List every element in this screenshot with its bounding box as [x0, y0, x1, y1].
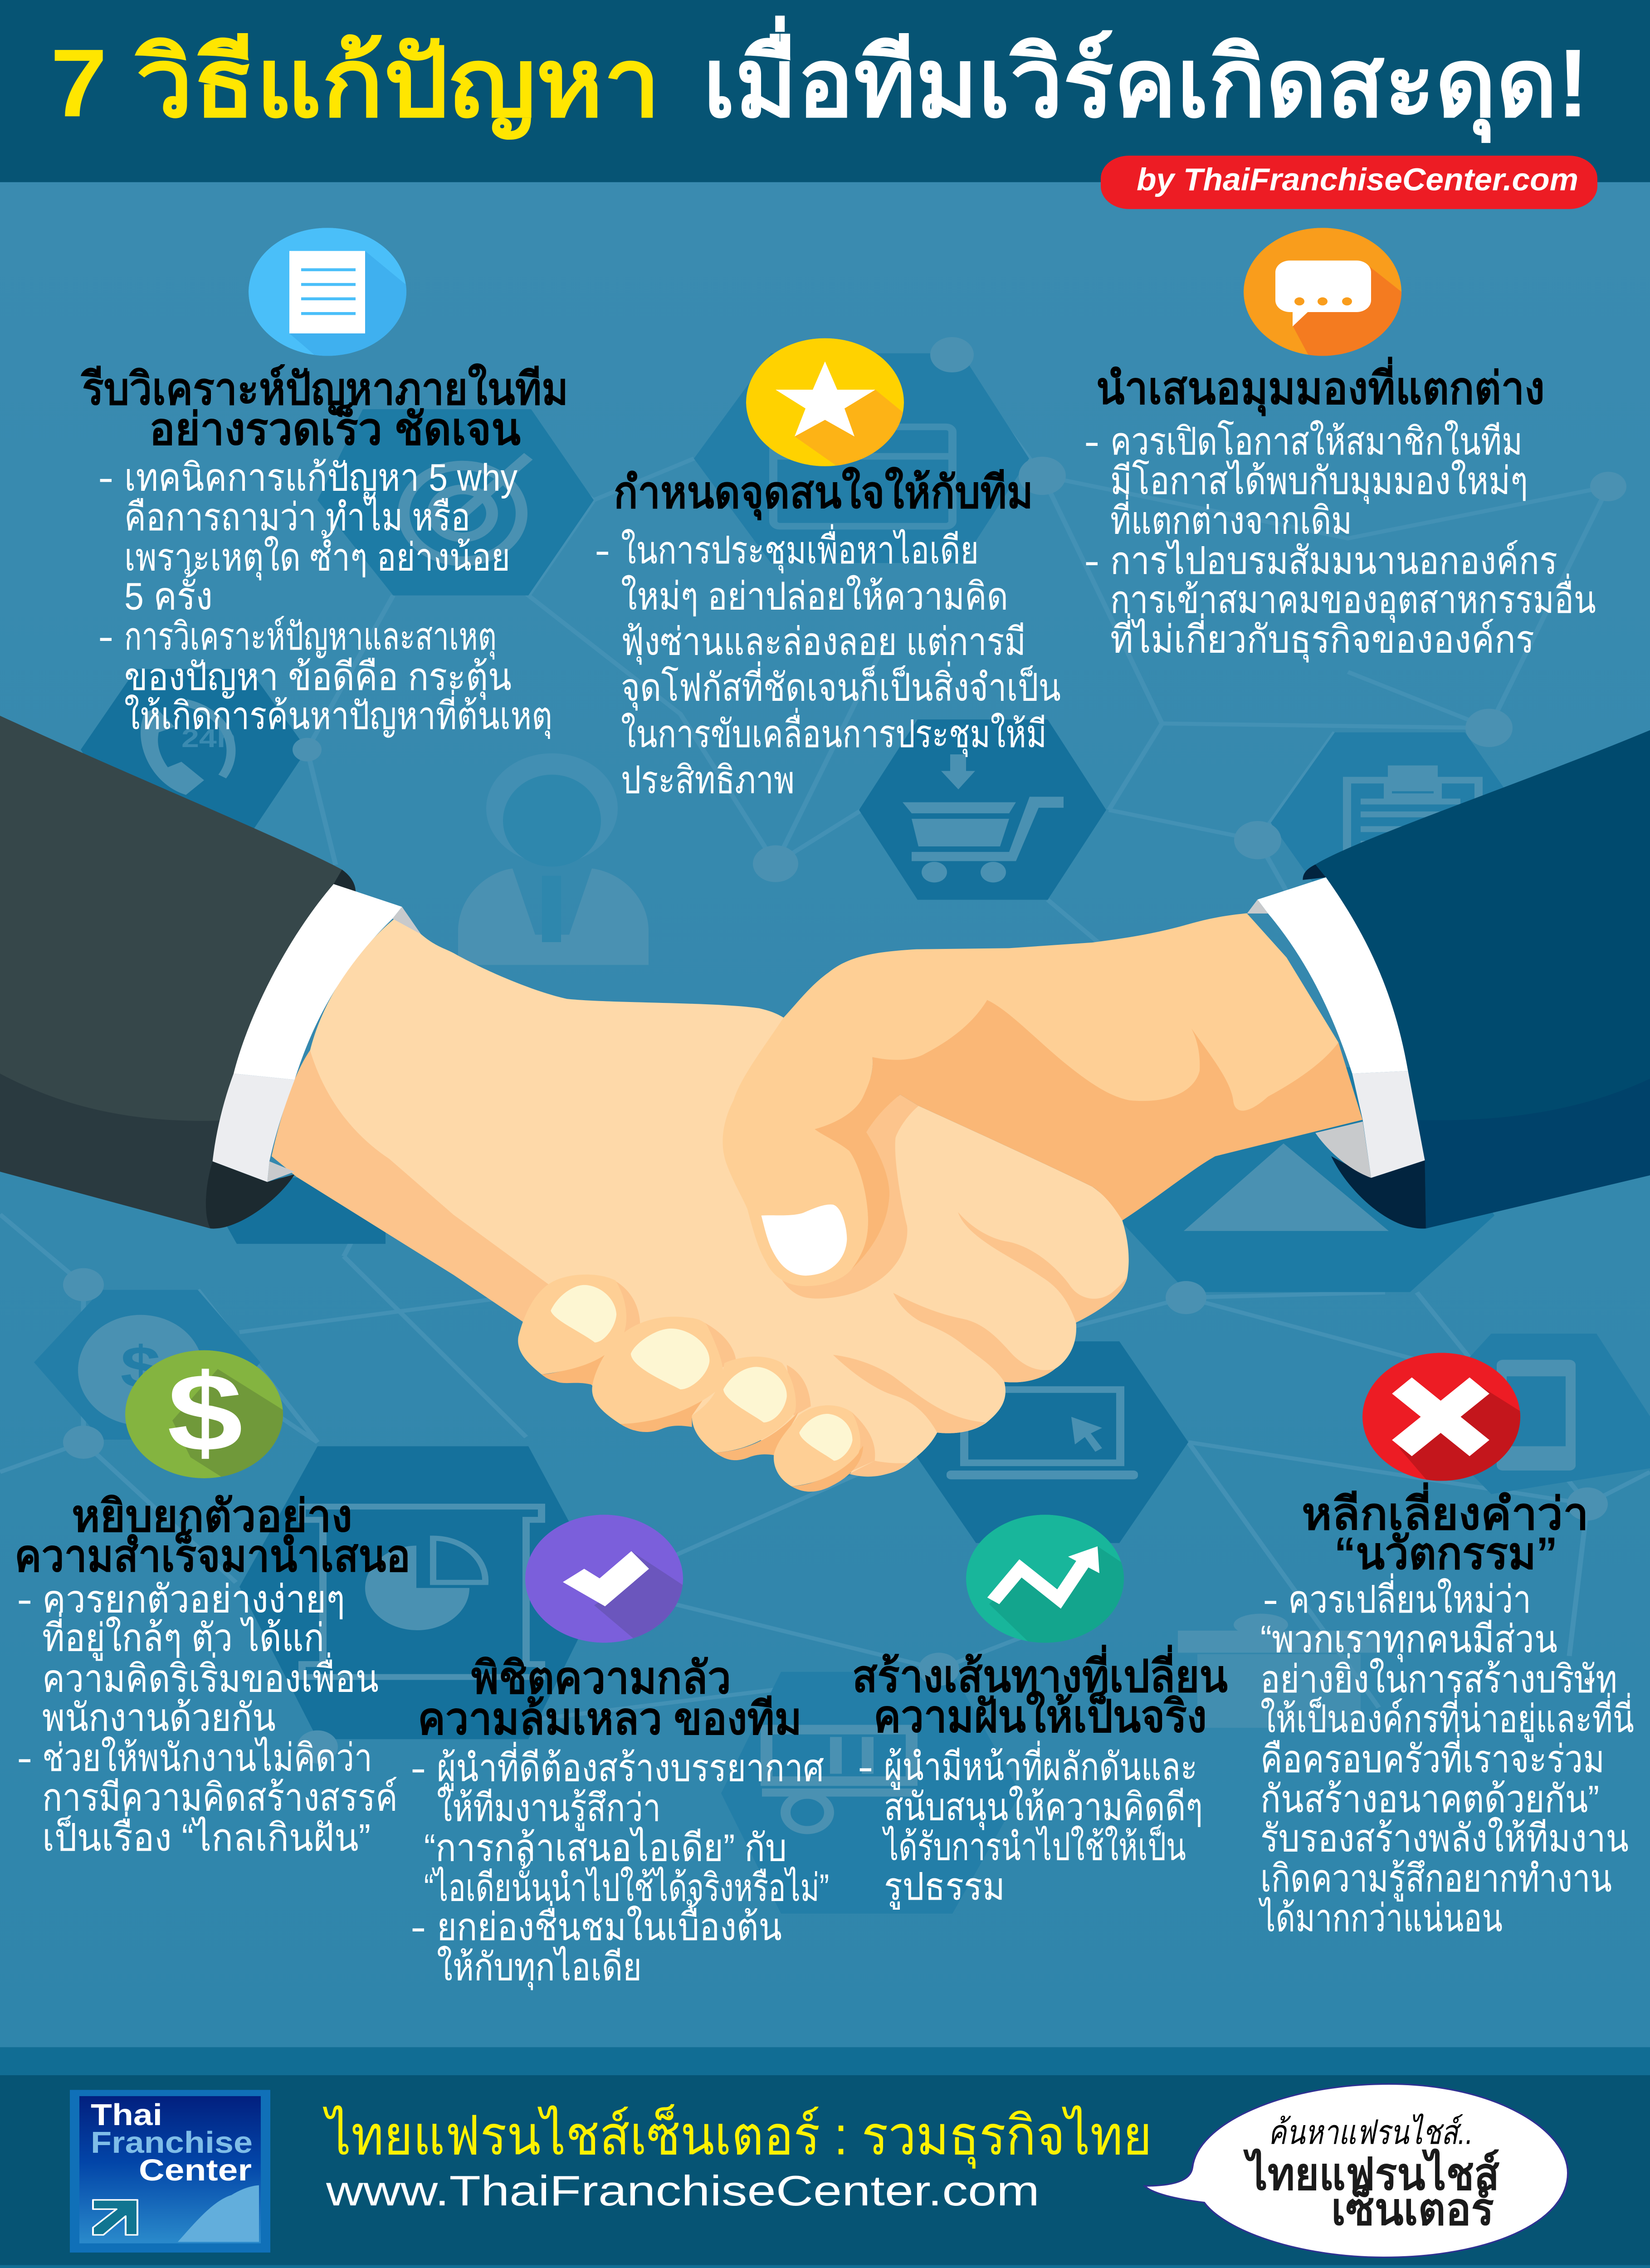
right hand shadow: [815, 1000, 1362, 1269]
body text: -: [17, 1736, 33, 1779]
heading: “นวัตกรรม”: [1334, 1528, 1557, 1579]
heading: รีบวิเคราะห์ปัญหาภายในทีม: [81, 363, 568, 416]
body text: -: [858, 1745, 874, 1789]
icon: dollar: [125, 1350, 283, 1478]
thumb nail: [762, 1204, 847, 1276]
body text: ใหม่ๆ อย่าปล่อยให้ความคิด: [621, 575, 1008, 618]
body text: ในการประชุมเพื่อหาไอเดีย: [621, 524, 979, 573]
icon: background phone 24h: 24h: [181, 723, 236, 753]
body text: -: [98, 456, 114, 499]
body text: ควรเปลี่ยนใหม่ว่า: [1288, 1574, 1531, 1621]
right sleeve: [1303, 730, 1650, 1228]
speech bubble: ค้นหาแฟรนไชส์..: [1268, 2113, 1473, 2151]
byline badge: [1101, 156, 1597, 209]
body text: ยกย่องชื่นชมในเบื้องต้น: [437, 1899, 782, 1949]
logo: Center: [139, 2153, 252, 2187]
body text: -: [1084, 539, 1100, 582]
body text: [1258, 1574, 1634, 1940]
body text: เพราะเหตุใด ซ้ำๆ อย่างน้อย: [124, 530, 510, 581]
icon: background dollar: [78, 1315, 203, 1425]
icon: background cart: [903, 754, 1064, 882]
panel: different perspectives: [1084, 357, 1596, 663]
icon: cross: [1362, 1353, 1520, 1481]
body text: [1084, 420, 1596, 663]
finger 1: [518, 1275, 626, 1386]
heading: อย่างรวดเร็ว ชัดเจน: [149, 402, 521, 454]
heading: [15, 1491, 410, 1581]
body text: การวิเคราะห์ปัญหาและสาเหตุ: [124, 615, 497, 660]
finger 2: [592, 1317, 723, 1432]
icon: background gift: [1178, 1614, 1380, 1728]
heading: [852, 1645, 1228, 1741]
panel: analyse the problem: [81, 363, 568, 739]
heading: [418, 1652, 802, 1744]
icon: background laptop: [947, 1389, 1138, 1479]
body text: “การกล้าเสนอไอเดีย” กับ: [424, 1827, 787, 1869]
icon: background phone 24h: [141, 703, 236, 795]
heading: พิชิตความกลัว: [471, 1652, 731, 1703]
logo: [70, 2090, 270, 2253]
icon: background tablet: [1497, 1360, 1576, 1471]
body text: ผู้นำมีหน้าที่ผลักดันและ: [884, 1741, 1197, 1790]
footer headline: ไทยแฟรนไชส์เซ็นเตอร์ : รวมธุรกิจไทย: [323, 2104, 1152, 2168]
panel: make dreams real: [852, 1645, 1228, 1910]
icon: background truck: [762, 1730, 916, 1830]
heading: หลีกเลี่ยงคำว่า: [1302, 1482, 1589, 1539]
heading: ความล้มเหลว ของทีม: [418, 1693, 802, 1744]
body text: พนักงานด้วยกัน: [42, 1696, 276, 1739]
body text: [17, 1578, 398, 1859]
body text: [410, 1742, 829, 1990]
body text: ที่อยู่ใกล้ๆ ตัว ได้แก่: [42, 1612, 324, 1661]
heading: กำหนดจุดสนใจให้กับทีม: [614, 467, 1033, 521]
body text: -: [1084, 420, 1100, 463]
body text: -: [17, 1578, 33, 1621]
right hand: [722, 913, 1338, 1286]
speech bubble: [1145, 2084, 1568, 2257]
body text: ได้มากกว่าแน่นอน: [1258, 1897, 1503, 1940]
body text: ให้กับทุกไอเดีย: [437, 1946, 642, 1990]
heading: หยิบยกตัวอย่าง: [72, 1491, 352, 1541]
body text: รูปธรรม: [884, 1865, 1005, 1910]
finger 4: [774, 1405, 863, 1492]
icon: background dollar: $: [121, 1334, 161, 1400]
heading: [1302, 1482, 1589, 1579]
finger 3: [692, 1357, 798, 1460]
heading: ความสำเร็จมานำเสนอ: [15, 1529, 410, 1581]
body text: [595, 524, 1061, 802]
body text: สนับสนุนให้ความคิดดีๆ: [884, 1786, 1203, 1830]
handshake illustration: [0, 716, 1650, 1492]
icon: background clipboard: [1347, 765, 1479, 883]
body text: ให้ทีมงานรู้สึกว่า: [437, 1787, 661, 1831]
band above footer: [0, 2047, 1650, 2075]
body text: -: [410, 1747, 426, 1789]
heading: สร้างเส้นทางที่เปลี่ยน: [852, 1645, 1228, 1701]
body text: ความคิดริเริ่มของเพื่อน: [42, 1652, 379, 1700]
left sleeve: [0, 716, 356, 1229]
body text: ฟุ้งซ่านและล่องลอย แต่การมี: [621, 621, 1026, 665]
heading: [81, 363, 568, 454]
body text: คือการถามว่า ทำไม หรือ: [124, 496, 470, 539]
body text: การมีความคิดสร้างสรรค์: [42, 1776, 398, 1819]
body text: [98, 456, 552, 739]
body text: เทคนิคการแก้ปัญหา 5 why: [124, 456, 518, 499]
body text: ในการขับเคลื่อนการประชุมให้มี: [621, 708, 1047, 757]
body text: -: [410, 1906, 426, 1949]
panel: avoid the word innovation: [1258, 1482, 1634, 1940]
heading: ความฝันให้เป็นจริง: [874, 1689, 1207, 1741]
header: [0, 0, 1650, 209]
left hand: [272, 919, 1129, 1475]
logo: Thai: [91, 2098, 162, 2131]
panel: conquer fear: [410, 1652, 829, 1990]
title: 7 วิธีแก้ปัญหา: [50, 29, 661, 140]
icon: background calendar: [773, 427, 952, 526]
footer: [0, 2075, 1650, 2268]
icon: background target: [404, 456, 528, 561]
body text: ควรยกตัวอย่างง่ายๆ: [42, 1578, 345, 1621]
speech bubble: เซ็นเตอร์: [1331, 2182, 1494, 2234]
body text: -: [1263, 1578, 1279, 1621]
icon: background person: [458, 753, 649, 965]
panel: success stories: [15, 1491, 410, 1859]
icon: dollar: $: [167, 1351, 243, 1474]
hands: [272, 913, 1362, 1492]
body text: ให้เกิดการค้นหาปัญหาที่ต้นเหตุ: [124, 690, 552, 739]
logo: Franchise: [91, 2125, 253, 2159]
shirt cuffs: [213, 877, 1425, 1182]
body text: “ไอเดียนั้นนำไปใช้ได้จริงหรือไม่”: [424, 1860, 829, 1909]
icon: speech bubble: [1244, 228, 1401, 356]
title: [50, 15, 1589, 143]
icon: star: [746, 338, 904, 466]
body text: ช่วยให้พนักงานไม่คิดว่า: [42, 1736, 372, 1779]
body text: ผู้นำที่ดีต้องสร้างบรรยากาศ: [437, 1742, 824, 1791]
body text: ที่แตกต่างจากเดิม: [1110, 494, 1352, 542]
panel: set the focus: [595, 467, 1061, 802]
icon: check: [525, 1515, 683, 1643]
body text: เป็นเรื่อง “ไกลเกินฝัน”: [42, 1812, 371, 1859]
speech bubble: ไทยแฟรนไชส์: [1243, 2149, 1499, 2200]
body text: [858, 1741, 1203, 1910]
body text: ประสิทธิภาพ: [621, 759, 795, 802]
body text: จุดโฟกัสที่ชัดเจนก็เป็นสิ่งจำเป็น: [621, 661, 1061, 711]
body text: ของปัญหา ข้อดีคือ กระตุ้น: [124, 655, 512, 700]
body text: ได้รับการนำไปใช้ให้เป็น: [882, 1824, 1186, 1868]
footer url: www.ThaiFranchiseCenter.com: [326, 2167, 1040, 2215]
body text: 5 ครั้ง: [124, 569, 213, 618]
icon: trend arrow: [966, 1515, 1124, 1643]
icon: document: [249, 228, 406, 356]
icon: background presentation: [302, 1506, 542, 1677]
body text: -: [595, 529, 610, 572]
icon: background triangle: [1184, 1144, 1389, 1231]
body text: -: [98, 615, 114, 658]
